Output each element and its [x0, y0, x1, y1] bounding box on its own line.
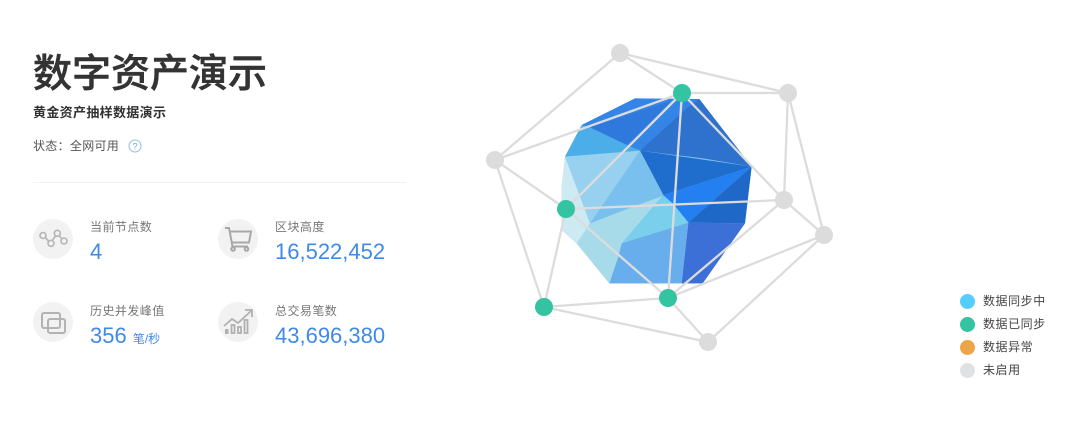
stat: total transactions — [218, 302, 385, 348]
value: 4 — [90, 239, 102, 264]
polyhedron — [562, 98, 752, 283]
status text: 状态：全网可用 — [33, 139, 119, 153]
icon: help: ? — [132, 141, 138, 152]
divider — [33, 182, 406, 183]
legend: disabled — [960, 363, 1021, 378]
label: 区块高度 — [275, 220, 325, 234]
legend — [960, 294, 1046, 378]
stat: block height — [218, 219, 385, 264]
legend: synced: 数据已同步 — [983, 317, 1046, 331]
label: 历史并发峰值 — [90, 304, 165, 318]
status line — [33, 139, 142, 153]
stat: current nodes — [33, 219, 152, 264]
icon: growth chart — [218, 302, 258, 342]
legend: disabled: 未启用 — [983, 363, 1021, 377]
nodes: unused — [486, 44, 833, 351]
nodes: synced — [535, 84, 691, 316]
value: 356 笔/秒 — [90, 323, 160, 348]
value: 16,522,452 — [275, 239, 385, 264]
icon: cart — [218, 219, 258, 259]
icon: help — [128, 140, 142, 152]
label: 总交易笔数 — [275, 304, 337, 318]
value: 43,696,380 — [275, 323, 385, 348]
icon: nodes — [33, 219, 73, 259]
legend: abnormal: 数据异常 — [983, 340, 1033, 354]
label: 当前节点数 — [90, 220, 152, 234]
subtitle: 黄金资产抽样数据演示 — [33, 105, 166, 120]
icon: overlapping squares — [33, 302, 73, 342]
connections — [495, 53, 824, 342]
stat: peak concurrency — [33, 302, 165, 348]
legend: abnormal — [960, 340, 1033, 355]
legend: syncing: 数据同步中 — [983, 294, 1046, 308]
legend: synced — [960, 317, 1046, 332]
legend: syncing — [960, 294, 1046, 309]
title: 数字资产演示 — [33, 53, 267, 96]
